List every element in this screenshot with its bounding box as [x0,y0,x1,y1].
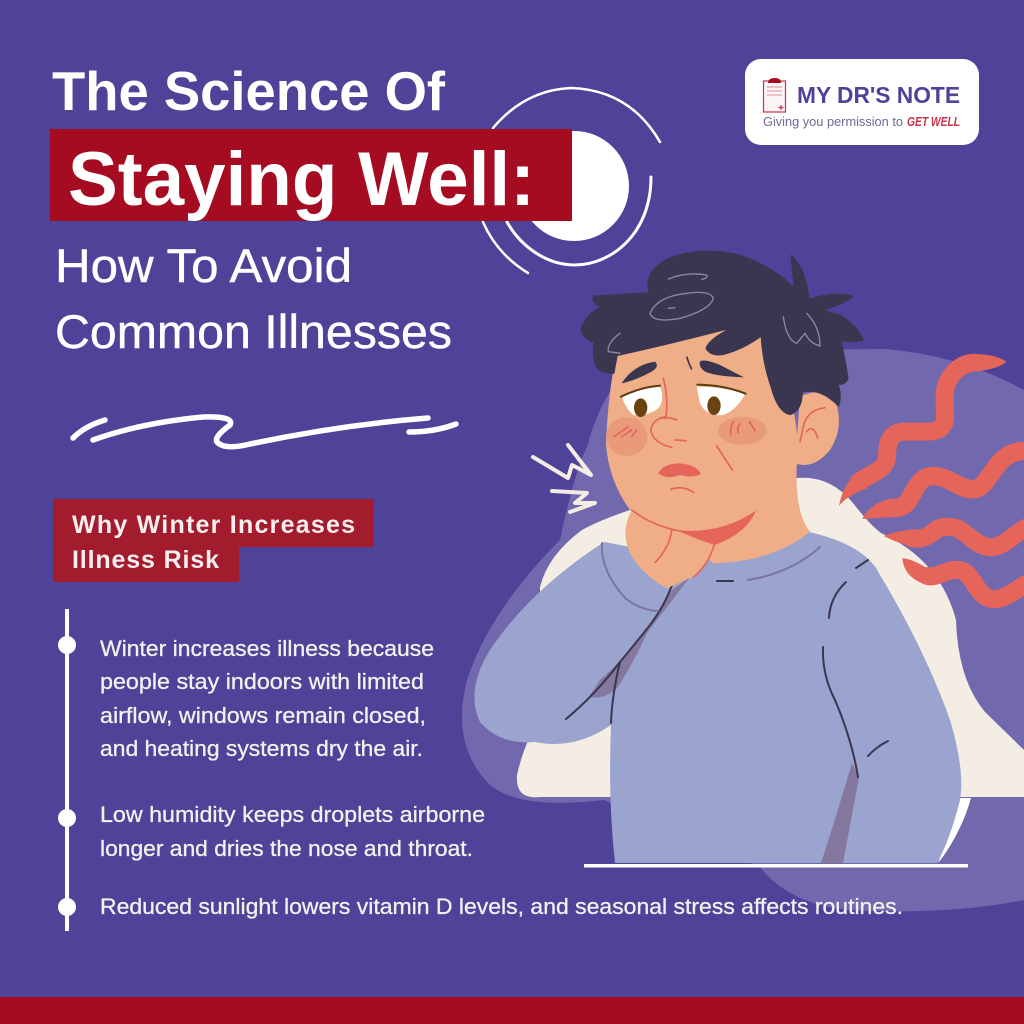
mouth [658,463,701,477]
bullet text 2: longer and dries the nose and throat. [100,836,473,861]
bullet text 2 [100,802,485,861]
eye right [697,385,746,415]
subtitle: How To Avoid [55,239,352,292]
sweater shadows [589,577,859,863]
section heading: why winter increases illness risk: Illness Risk [72,546,219,574]
section heading: why winter increases illness risk [53,499,374,582]
logo tagline emphasis: GET WELL [907,114,960,129]
face [606,325,798,533]
neck [663,467,810,563]
hand [625,510,717,588]
bullet text 1: Winter increases illness because [100,636,434,661]
background blob [462,349,1024,911]
logo tagline: Giving you permission to [763,114,903,129]
sweater lines [566,560,888,777]
neck shadow [677,511,756,545]
floor line [584,864,968,868]
hair highlights [608,274,820,353]
title line 1: The Science Of [52,60,446,122]
hair [582,252,863,414]
face lines [614,378,825,577]
title highlight bar: Staying Well: [68,137,535,222]
cheek right [718,417,766,445]
wave 1 [839,354,1007,506]
bullet text 1: airflow, windows remain closed, [100,703,426,728]
decorative squiggle [73,417,456,447]
white sliver [938,798,971,863]
subtitle [55,239,452,358]
wave 4 [902,558,1024,599]
bullet text 2: Low humidity keeps droplets airborne [100,802,485,827]
bottom bar [0,997,1024,1024]
section heading: why winter increases illness risk: Why Winter Increases [72,511,355,539]
cheek left [606,417,647,456]
logo card [745,59,979,145]
subtitle: Common Illnesses [55,305,452,358]
heat waves [839,354,1024,599]
head and hand [582,252,863,588]
character illustration [474,252,1024,868]
bullet text 3: Reduced sunlight lowers vitamin D levels, and seasonal stress affects routines. [100,894,903,919]
sweater [474,532,961,863]
eye left [621,386,662,417]
bullet text 1: and heating systems dry the air. [100,736,423,761]
wave 2 [862,450,1024,519]
sun with rings [483,88,660,273]
pain bolts [533,445,595,512]
wave 3 [884,523,1024,547]
bullet text 1: people stay indoors with limited [100,669,424,694]
timeline [58,609,76,931]
blanket [517,478,1024,797]
icon: clipboard [764,78,786,112]
eyebrows [622,357,744,383]
ear [795,392,839,465]
bullet text 1 [100,636,434,761]
logo name: MY DR'S NOTE [797,82,960,108]
collar and cuff [602,543,820,611]
